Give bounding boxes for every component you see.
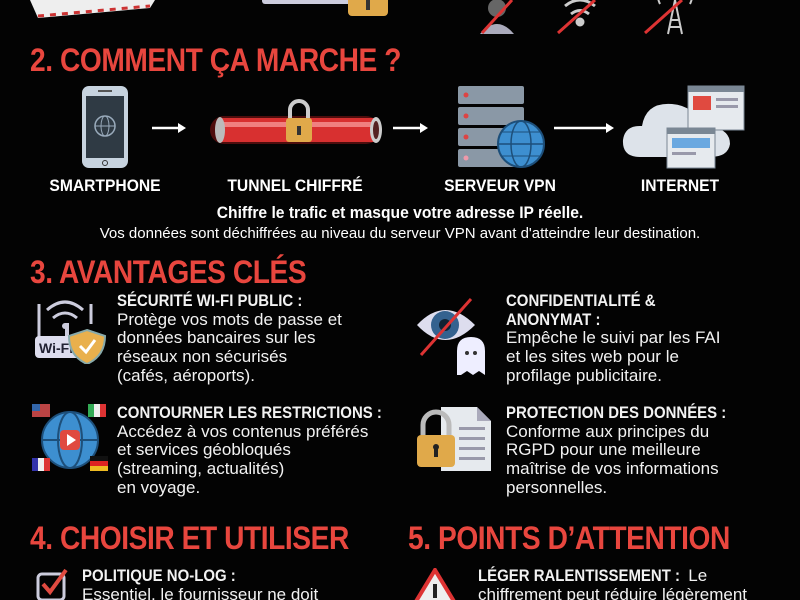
item: confidentiality: et les sites web pour le bbox=[506, 347, 679, 366]
item: slowdown: Le bbox=[688, 566, 707, 585]
item: restrictions: (streaming, actualités) bbox=[117, 459, 284, 478]
icon: checkbox bbox=[36, 568, 68, 600]
item: wifi: réseaux non sécurisés bbox=[117, 347, 287, 366]
item: wifi: données bancaires sur les bbox=[117, 328, 315, 347]
item: confidentiality: Empêche le suivi par les FAI bbox=[506, 328, 720, 347]
icon: internet cloud bbox=[623, 86, 744, 168]
icon: wifi shield: Wi-Fi bbox=[39, 340, 73, 356]
item: wifi: Protège vos mots de passe et bbox=[117, 310, 342, 329]
icon: lock document bbox=[417, 407, 491, 471]
item: no-log bbox=[82, 566, 318, 600]
arrow bbox=[152, 123, 186, 133]
envelope bbox=[30, 0, 155, 18]
item: restrictions: et services géobloqués bbox=[117, 440, 291, 459]
item: confidentiality: CONFIDENTIALITÉ & bbox=[506, 291, 656, 310]
item: wifi bbox=[117, 291, 342, 385]
icon: wifi shield bbox=[35, 300, 106, 364]
item: confidentiality bbox=[506, 291, 720, 385]
item: restrictions: Accédez à vos contenus préférés bbox=[117, 422, 368, 441]
item: wifi: (cafés, aéroports). bbox=[117, 366, 255, 385]
item: data protection: maîtrise de vos informations bbox=[506, 459, 719, 478]
icon: encrypted tunnel bbox=[210, 101, 382, 144]
crossed hacker bbox=[480, 0, 514, 34]
flow diagram bbox=[82, 86, 744, 168]
text: SERVEUR VPN bbox=[444, 176, 556, 195]
item: no-log: POLITIQUE NO-LOG : bbox=[82, 566, 236, 585]
icon: eye ghost bbox=[417, 298, 485, 375]
heading 2: 2. COMMENT ÇA MARCHE ? bbox=[30, 42, 401, 78]
text: INTERNET bbox=[641, 176, 719, 195]
item: restrictions: CONTOURNER LES RESTRICTIONS : bbox=[117, 403, 382, 422]
item: data protection: Conforme aux principes du bbox=[506, 422, 709, 441]
icon: smartphone bbox=[82, 86, 128, 168]
heading 4: 4. CHOISIR ET UTILISER bbox=[30, 520, 349, 556]
item: restrictions: en voyage. bbox=[117, 478, 200, 497]
caption: Chiffre le trafic et masque votre adresse IP réelle. bbox=[217, 203, 583, 222]
caption bbox=[100, 203, 700, 242]
device with lock bbox=[262, 0, 388, 16]
item: confidentiality: ANONYMAT : bbox=[506, 310, 600, 329]
item: confidentiality: profilage publicitaire. bbox=[506, 366, 662, 385]
item: slowdown: LÉGER RALENTISSEMENT : bbox=[478, 566, 680, 585]
crossed tower bbox=[645, 0, 692, 34]
arrow bbox=[393, 123, 428, 133]
crossed wifi bbox=[558, 0, 595, 33]
text: TUNNEL CHIFFRÉ bbox=[227, 176, 363, 195]
heading 5: 5. POINTS D’ATTENTION bbox=[408, 520, 730, 556]
icon: warning bbox=[414, 568, 456, 600]
item: wifi: SÉCURITÉ WI-FI PUBLIC : bbox=[117, 291, 302, 310]
item: data protection: RGPD pour une meilleure bbox=[506, 440, 701, 459]
heading 3: 3. AVANTAGES CLÉS bbox=[30, 254, 306, 290]
item: data protection bbox=[506, 403, 726, 497]
item: data protection: personnelles. bbox=[506, 478, 607, 497]
item: restrictions bbox=[117, 403, 382, 497]
item: data protection: PROTECTION DES DONNÉES : bbox=[506, 403, 726, 422]
caption: Vos données sont déchiffrées au niveau du serveur VPN avant d'atteindre leur destination. bbox=[100, 225, 700, 242]
section 1 remnants: icons bbox=[30, 0, 692, 34]
icon: vpn server bbox=[458, 86, 544, 167]
icon: globe flags bbox=[32, 404, 108, 471]
item: slowdown bbox=[478, 566, 747, 600]
labels: SMARTPHONE bbox=[49, 176, 161, 195]
arrow bbox=[554, 123, 614, 133]
